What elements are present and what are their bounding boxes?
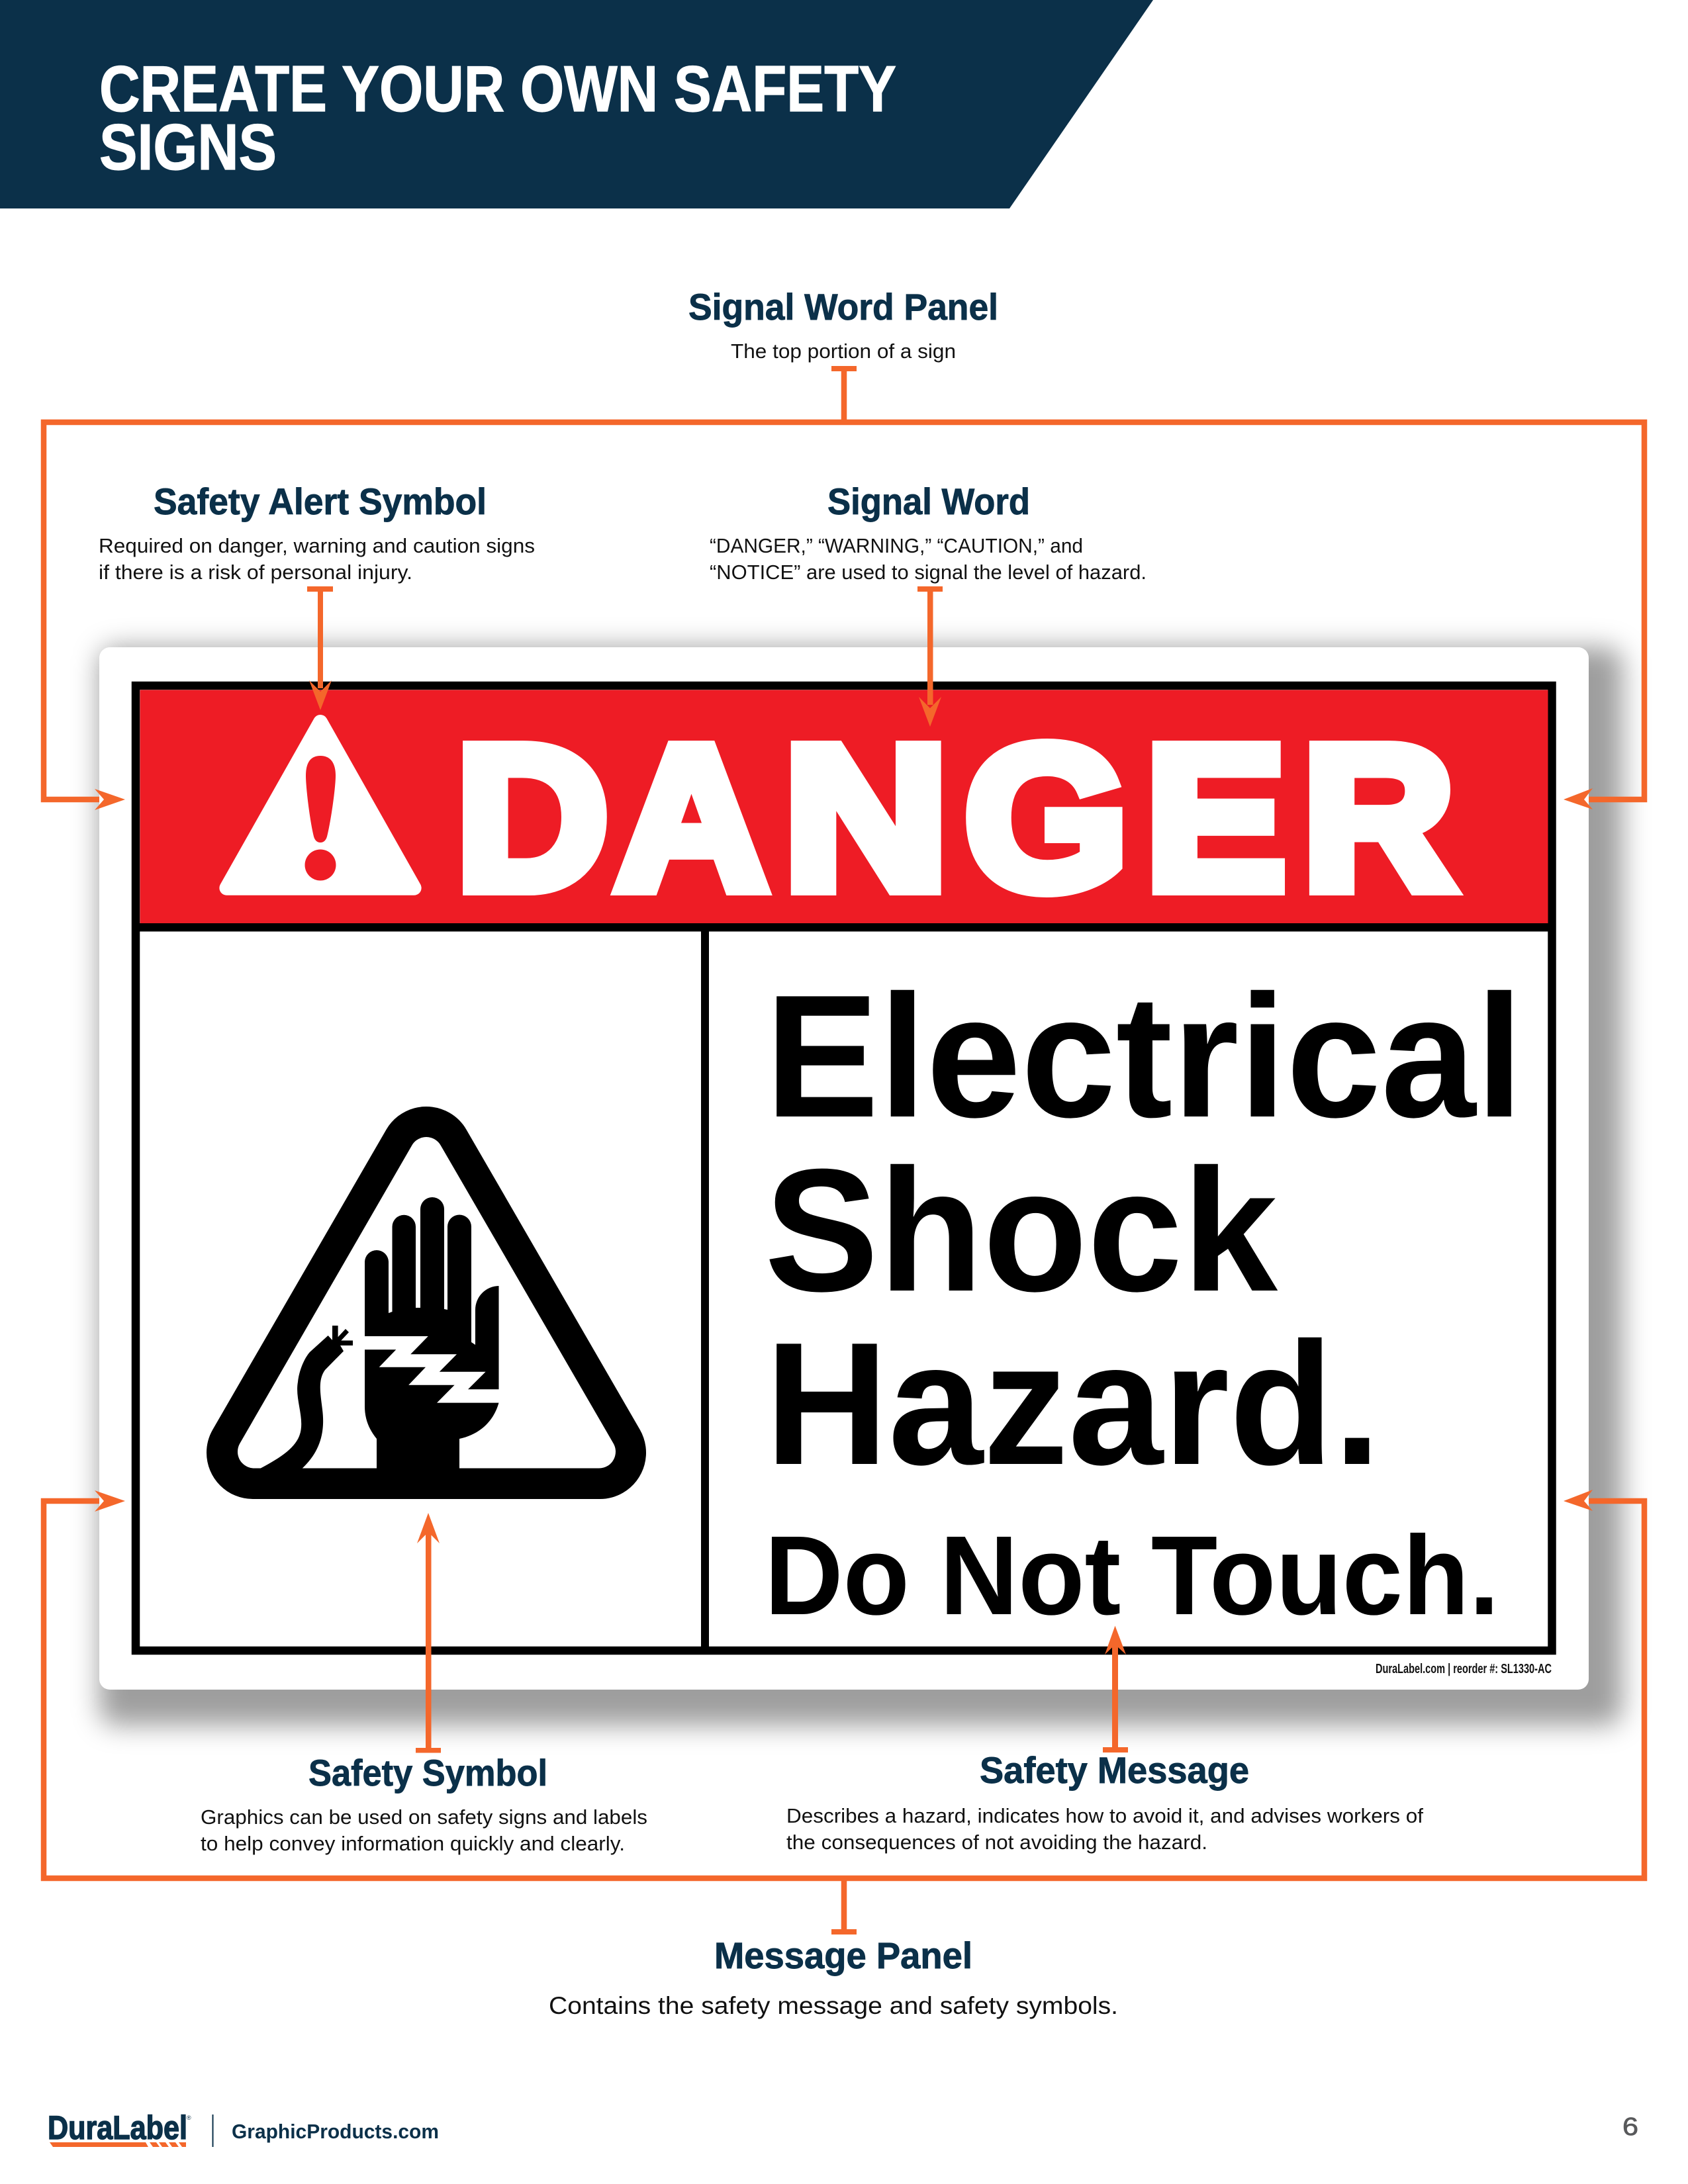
bracket: signal word panel <box>44 369 1644 799</box>
lightning bolt <box>364 1336 500 1403</box>
callout: safety symbol: Safety Symbol <box>308 1752 547 1794</box>
callout: safety message: Describes a hazard, indicates how to avoid it, and advises workers of <box>786 1804 1423 1827</box>
reorder note: DuraLabel.com | reorder #: SL1330-AC <box>1376 1662 1552 1676</box>
callout: safety alert symbol: if there is a risk of personal injury. <box>99 561 412 584</box>
icon: safety alert triangle <box>226 722 414 888</box>
callout: signal word: “DANGER,” “WARNING,” “CAUTION,” and <box>710 534 1083 557</box>
arrow: safety alert symbol <box>307 586 333 710</box>
callout: signal word: Signal Word <box>827 480 1030 522</box>
safety message: Hazard. <box>765 1306 1381 1501</box>
power cord <box>256 1336 344 1471</box>
callout: signal word <box>710 480 1147 584</box>
callout: signal word panel: The top portion of a sign <box>731 340 956 363</box>
callout: message panel: Contains the safety message and safety symbols. <box>549 1992 1118 2019</box>
title: CREATE YOUR OWN SAFETY <box>99 52 896 125</box>
callout: message panel: Message Panel <box>714 1934 972 1976</box>
callout: safety message: the consequences of not avoiding the hazard. <box>786 1831 1207 1854</box>
sign <box>99 647 1589 1690</box>
callout: message panel <box>549 1934 1118 2019</box>
safety message: Do Not Touch. <box>765 1513 1499 1639</box>
callout: safety symbol: Graphics can be used on safety signs and labels <box>201 1805 647 1829</box>
callout: safety message <box>786 1749 1423 1854</box>
signal word text: R <box>1303 704 1454 932</box>
title: SIGNS <box>99 111 277 183</box>
panel divider <box>701 927 709 1651</box>
callout: signal word: “NOTICE” are used to signal the level of hazard. <box>710 561 1147 584</box>
callout: signal word panel <box>688 286 998 363</box>
footer logo: DuraLabel: ® <box>187 2115 191 2121</box>
footer website: GraphicProducts.com <box>232 2120 439 2143</box>
sign card drop shadow <box>99 647 1622 1725</box>
signal word text: E <box>1146 704 1286 932</box>
sign frame <box>136 686 1552 1651</box>
safety message <box>765 958 1523 1639</box>
hand <box>365 1197 499 1471</box>
signal word panel <box>136 690 1552 932</box>
callout: safety message: Safety Message <box>980 1749 1249 1791</box>
signal word text: A <box>616 704 767 932</box>
callout: safety symbol <box>201 1752 647 1855</box>
sign card <box>99 647 1589 1690</box>
callout: safety alert symbol: Required on danger, warning and caution signs <box>99 534 535 557</box>
callout: signal word panel: Signal Word Panel <box>688 286 998 328</box>
page number: 6 <box>1622 2113 1638 2141</box>
footer logo: DuraLabel: DuraLabel <box>48 2109 187 2146</box>
arrow: signal word <box>917 586 943 727</box>
footer divider <box>212 2115 213 2147</box>
arrowheads: panel brackets <box>95 788 1593 1512</box>
icon: electrical shock safety symbol <box>253 1153 600 1471</box>
signal word text: G <box>965 704 1128 932</box>
callout: safety alert symbol: Safety Alert Symbol <box>154 480 487 522</box>
arrow: safety message <box>1103 1625 1128 1752</box>
safety message: Shock <box>765 1132 1279 1328</box>
signal word text: N <box>784 704 948 932</box>
callout: safety alert symbol <box>99 480 535 584</box>
bracket: message panel <box>44 1501 1644 1932</box>
header banner <box>0 0 1153 208</box>
signal word text: D <box>456 704 608 932</box>
callout: safety symbol: to help convey information quickly and clearly. <box>201 1832 625 1855</box>
safety message: Electrical <box>765 958 1523 1154</box>
arrow: safety symbol <box>416 1513 441 1752</box>
